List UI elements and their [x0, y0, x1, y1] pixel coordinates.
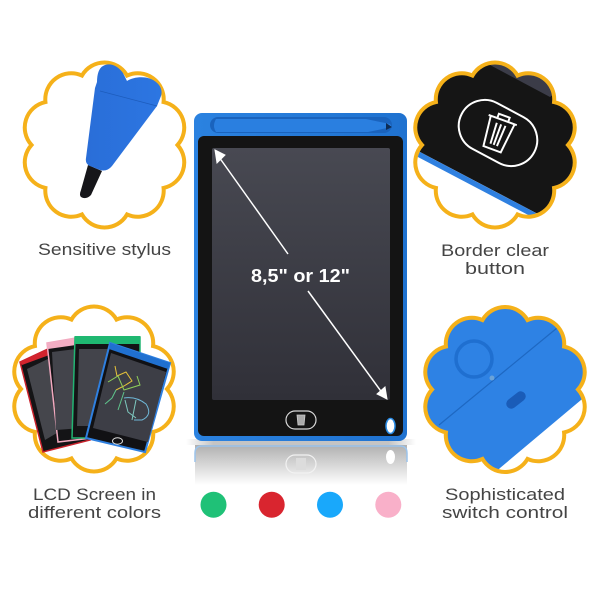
- flower frame: colors: [14, 306, 174, 472]
- label: switch control: switch control: [442, 503, 568, 522]
- tablet: blue with unicorn: [86, 343, 170, 452]
- icon: button: [112, 438, 122, 444]
- label: button: button: [465, 259, 525, 278]
- label: different colors: different colors: [28, 503, 161, 522]
- label: sophisticated: Sophisticated: [445, 485, 565, 504]
- label: sensitive stylus: Sensitive stylus: [38, 240, 171, 259]
- LCD screen: [212, 148, 390, 400]
- ring: [456, 341, 492, 377]
- tablet body: [194, 113, 407, 441]
- arrow: size top: [215, 150, 288, 254]
- main tablet: [186, 113, 416, 485]
- tablet: pink: [47, 338, 92, 442]
- swatch: red: [259, 492, 285, 518]
- tablet: green: [72, 336, 140, 438]
- flower frame: clear button: [415, 62, 575, 228]
- flower outline: clear button: [415, 62, 575, 228]
- swatch: pink: [375, 492, 401, 518]
- panel: LCD colors: [14, 306, 174, 522]
- black face: [198, 136, 403, 436]
- color swatches: [200, 492, 401, 518]
- tablet shadow and reflection: [186, 439, 416, 485]
- swatch: green: [200, 492, 226, 518]
- panel: switch control: [423, 305, 587, 518]
- LED light: [386, 418, 395, 434]
- drawing: unicorn: [105, 366, 149, 420]
- icon: stylus tip: [80, 64, 162, 198]
- panel: border clear button: [413, 60, 577, 274]
- flower frame: switch: [425, 307, 585, 472]
- label: border clear button: Border clear: [441, 241, 549, 260]
- size label: 8,5" or 12": [251, 266, 350, 286]
- tablet: red: [20, 348, 90, 452]
- flower outline: switch: [425, 307, 585, 472]
- clear button: [286, 411, 316, 429]
- pen slot and stylus: [210, 117, 392, 133]
- panel: sensitive stylus: [25, 62, 184, 259]
- label: LCD screen: LCD Screen in: [33, 485, 156, 504]
- swatch: blue: [317, 492, 343, 518]
- flower frame: stylus: [25, 62, 184, 228]
- icon: trash button: [450, 91, 546, 175]
- switch: [506, 391, 526, 409]
- small dot: [490, 376, 494, 380]
- close-up: blue tablet back: [427, 309, 583, 470]
- close-up: black tablet corner: [417, 64, 573, 215]
- arrow: size bottom: [308, 291, 387, 399]
